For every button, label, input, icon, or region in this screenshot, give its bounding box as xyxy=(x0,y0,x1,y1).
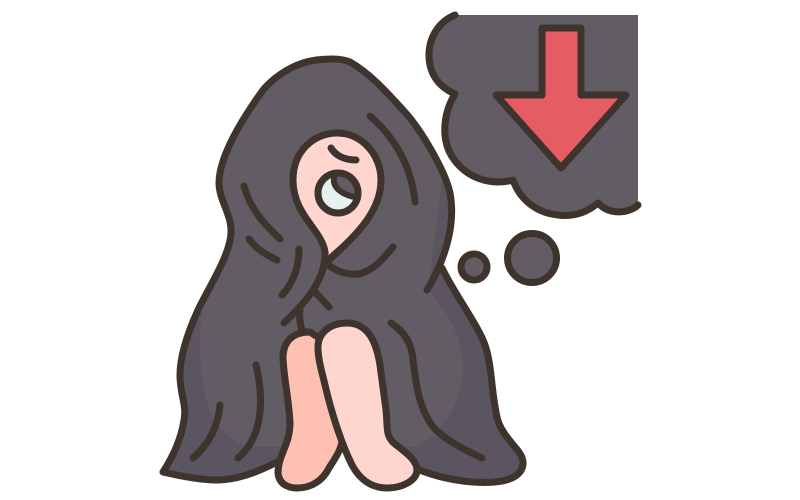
chin line xyxy=(328,247,393,274)
cloud outline xyxy=(429,15,638,216)
right leg xyxy=(318,323,417,488)
blanket base fill xyxy=(163,59,523,482)
blanket body xyxy=(163,40,523,482)
face shape xyxy=(293,133,381,258)
eye white xyxy=(318,173,358,213)
thought bubble: cloud with arrow xyxy=(429,15,638,216)
face xyxy=(284,133,393,323)
blanket fold lines xyxy=(193,116,482,458)
blanket outline right lower xyxy=(410,268,523,482)
blanket lighter area xyxy=(200,40,463,447)
left leg xyxy=(278,332,342,488)
illustration: person hiding under a blanket with a down-arrow thought xyxy=(160,12,642,492)
blanket outline left xyxy=(163,59,350,480)
icon: red down arrow xyxy=(496,28,626,168)
eyelid xyxy=(330,176,354,200)
blanket outline right upper xyxy=(350,62,452,290)
eye outline xyxy=(318,173,358,213)
eyebrow xyxy=(331,148,356,160)
face outline and neck fold xyxy=(284,133,381,323)
thought bubble: small circles xyxy=(461,234,556,282)
cloud fill xyxy=(429,15,638,216)
